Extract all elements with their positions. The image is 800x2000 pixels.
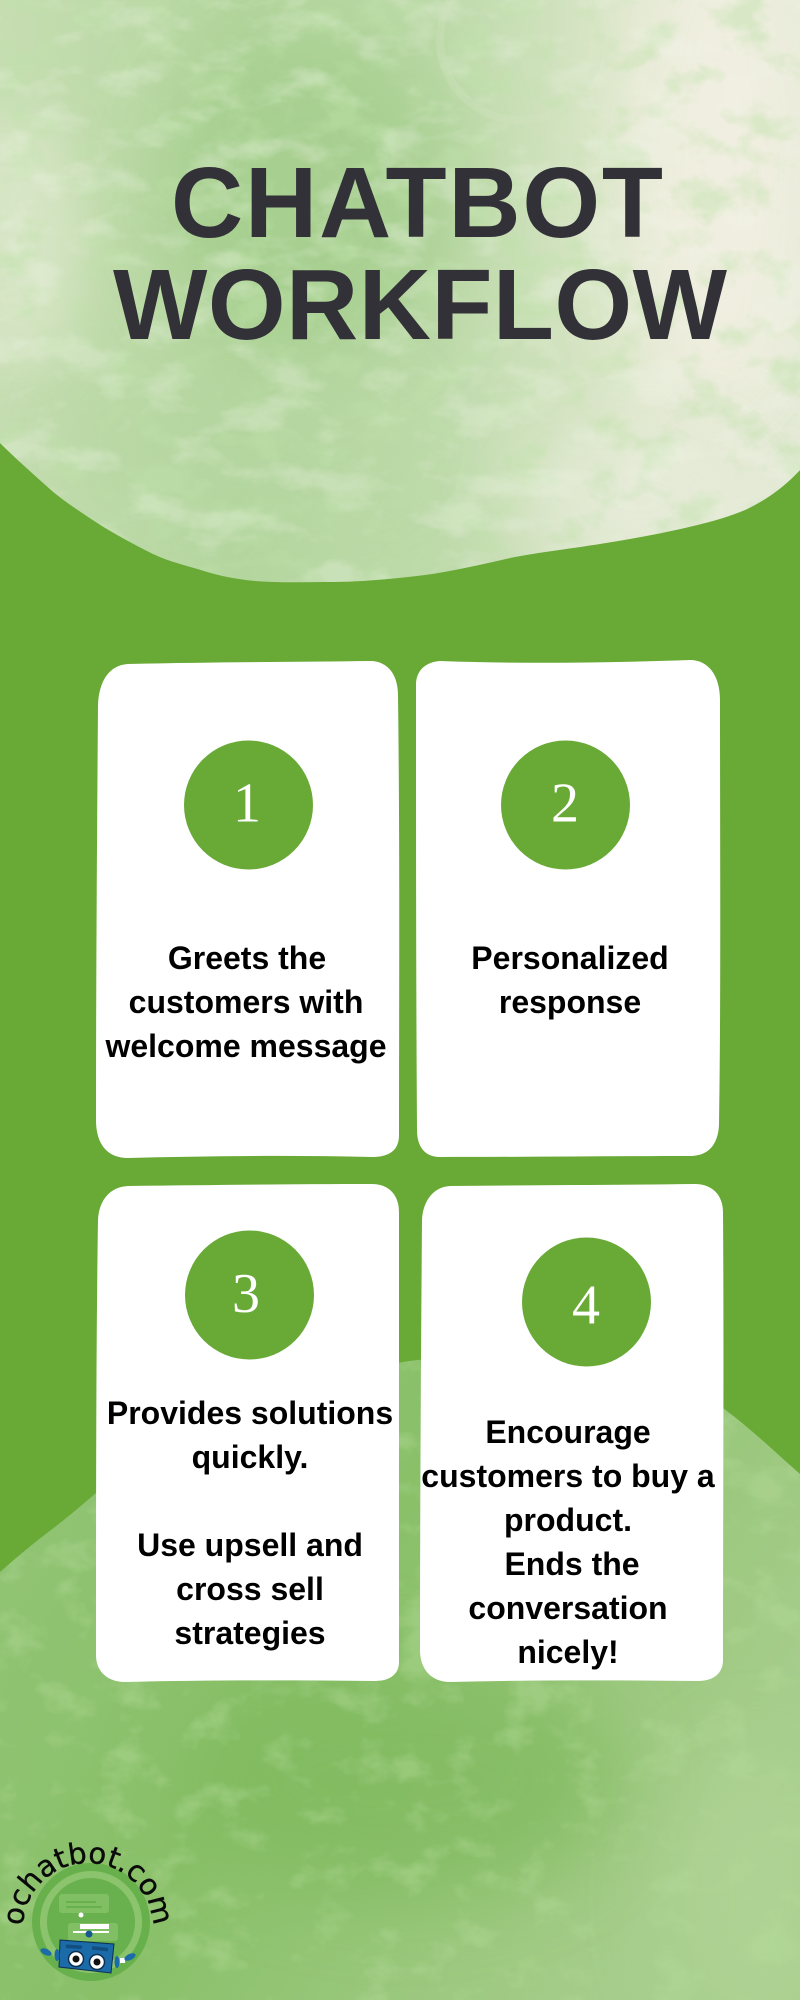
logo chat bubbles	[59, 1894, 118, 1941]
step 3 text: Provides solutions	[107, 1395, 393, 1431]
icon: robot	[39, 1930, 137, 1973]
step 4 text: nicely!	[517, 1634, 619, 1670]
card 2 background	[416, 660, 720, 1157]
step 3 text	[107, 1395, 393, 1651]
step 3 text: Use upsell and	[137, 1527, 363, 1563]
top watercolor blob	[0, 0, 800, 600]
step 1 number badge	[184, 740, 313, 870]
step 1 number badge: 1	[233, 772, 261, 834]
bottom watercolor blob	[0, 1350, 800, 2000]
logo inner disc	[47, 1878, 135, 1966]
step 2 text: Personalized	[471, 940, 669, 976]
card 1 background	[96, 661, 399, 1158]
step 2 text: response	[499, 984, 641, 1020]
step 4 text: conversation	[468, 1590, 668, 1626]
step 4 number badge: 4	[572, 1274, 600, 1336]
step 3 number badge: 3	[232, 1263, 260, 1325]
step 3 text: strategies	[174, 1615, 326, 1651]
step 4 text: customers to buy a	[421, 1458, 715, 1494]
logo text: ochatbot.com	[8, 1842, 169, 1924]
step 1 text: Greets the	[168, 940, 326, 976]
panel: step 1	[96, 661, 399, 1158]
panel: step 4	[420, 1184, 723, 1682]
step 2 number badge	[501, 740, 630, 870]
step 4 text: Encourage	[485, 1414, 651, 1450]
title: chatbot workflow: CHATBOT	[171, 147, 663, 259]
step 4 text	[421, 1414, 715, 1670]
card 4 background	[420, 1184, 723, 1682]
step 4 text: product.	[504, 1502, 632, 1538]
card 3 background	[96, 1184, 399, 1682]
title: chatbot workflow: WORKFLOW	[113, 249, 728, 361]
panel: step 2	[416, 660, 720, 1157]
title: chatbot workflow	[113, 147, 728, 361]
logo ring	[36, 1867, 146, 1977]
step 1 text: customers with	[129, 984, 363, 1020]
step 4 number badge	[522, 1238, 651, 1366]
step 2 number badge: 2	[551, 772, 579, 834]
step 3 text: cross sell	[176, 1571, 324, 1607]
step 4 text: Ends the	[504, 1546, 640, 1582]
step 1 text: welcome message	[104, 1028, 387, 1064]
step 3 number badge	[185, 1230, 314, 1360]
step 1 text	[104, 940, 387, 1064]
step 2 text	[471, 940, 669, 1020]
panel: step 3	[96, 1184, 399, 1682]
logo: ochatbot.com	[8, 1842, 169, 1981]
step 3 text: quickly.	[192, 1439, 308, 1475]
